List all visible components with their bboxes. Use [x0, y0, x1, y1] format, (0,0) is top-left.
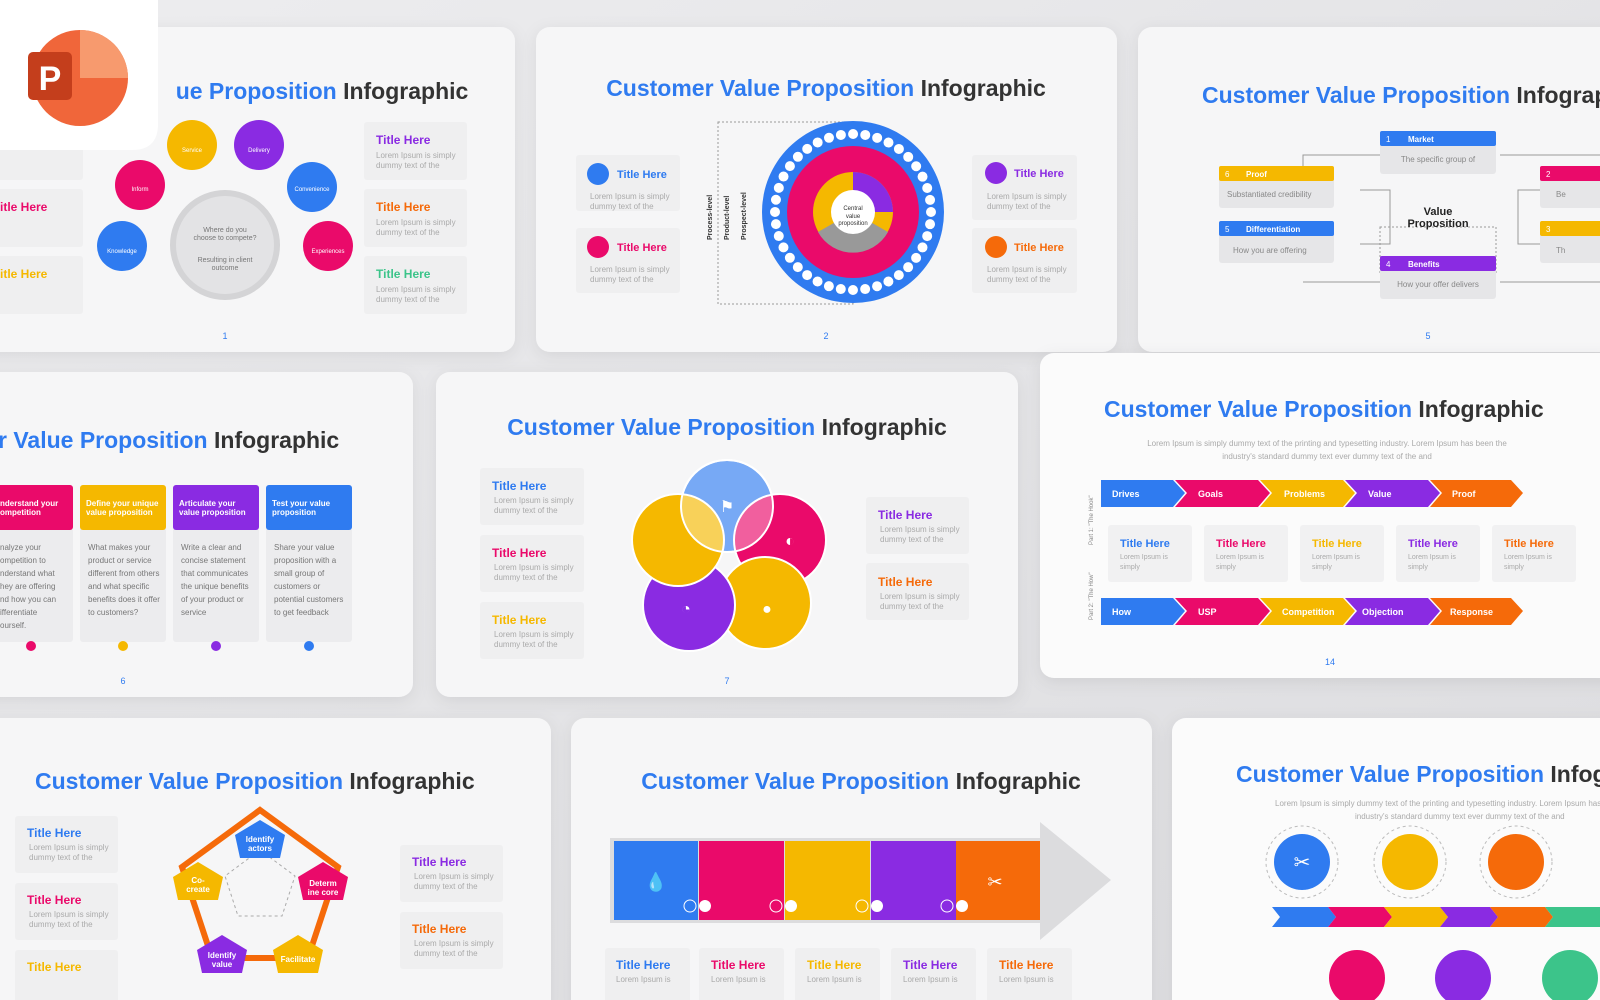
slide 6: four columns: ompetition — [0, 508, 41, 517]
slide 1: circle diagram: dummy text of the — [376, 228, 440, 237]
slide 6: four columns: to customers? — [88, 608, 139, 617]
slide 14 title: Customer Value Proposition Infographic — [1104, 396, 1544, 422]
slide 1: circle diagram: Experiences — [311, 249, 345, 255]
slide 5: flow diagram: Substantiated credibility — [1227, 190, 1312, 199]
slide: pentagon: value — [212, 960, 233, 969]
slide: circle icons: industry's standard dummy text ever dummy text of the and — [1355, 812, 1565, 821]
slide: pentagon: Lorem Ipsum is simply — [414, 872, 494, 881]
slide 1: circle diagram: Where do you — [203, 227, 247, 234]
slide: pentagon: Co- — [191, 876, 205, 885]
slide: big arrow bar: Lorem Ipsum is — [999, 975, 1054, 984]
slide: pentagon: create — [186, 885, 210, 894]
slide 14: arrow rows: How — [1112, 607, 1132, 617]
slide 6: four columns: to get feedback — [274, 608, 330, 617]
slide 1: circle diagram — [0, 27, 515, 352]
slide 7: venn: Lorem Ipsum is simply — [494, 563, 574, 572]
slide 6: four columns: ompetition to — [0, 556, 46, 565]
slide 14: arrow rows: Response — [1450, 607, 1493, 617]
slide 14: arrow rows: Title Here — [1504, 538, 1554, 550]
slide 5: flow diagram: Differentiation — [1246, 225, 1300, 234]
slide 1: circle diagram: Delivery — [248, 148, 270, 154]
slide 7: venn: Title Here — [492, 546, 547, 560]
slide 6: four columns: proposition — [272, 508, 316, 517]
slide 6: four columns: Write a clear and — [181, 543, 241, 552]
slide 2: wheel: Lorem Ipsum is simply — [590, 265, 670, 274]
slide 1: circle diagram: Lorem Ipsum is simply — [376, 218, 456, 227]
slide 14: arrow rows: Goals — [1198, 489, 1223, 499]
slide 2: wheel: proposition — [838, 221, 868, 227]
slide: pentagon: Lorem Ipsum is simply — [414, 939, 494, 948]
slide 7: venn: ● — [762, 601, 772, 618]
slide: pentagon: Title Here — [412, 922, 467, 936]
slide 5: flow diagram: The specific group of — [1401, 155, 1476, 164]
slide: pentagon — [0, 718, 551, 1000]
slide 7: venn: ◔ — [681, 601, 691, 618]
slide 6: four columns: ourself. — [0, 621, 26, 630]
slide: pentagon: Title Here — [27, 960, 82, 974]
slide: big arrow bar: Title Here — [999, 958, 1054, 972]
slide 7: venn: Lorem Ipsum is simply — [880, 525, 960, 534]
slide 7: venn: dummy text of the — [494, 506, 558, 515]
slide 14: arrow rows: Title Here — [1120, 538, 1170, 550]
arrow slide title: Customer Value Proposition Infographic — [641, 768, 1081, 794]
slide 6: four columns: Define your unique — [86, 499, 159, 508]
slide 7: venn: Lorem Ipsum is simply — [880, 592, 960, 601]
slide 7: venn: dummy text of the — [494, 640, 558, 649]
slide: big arrow bar — [571, 718, 1152, 1000]
slide 1: circle diagram: Resulting in client — [198, 257, 252, 264]
slide 14: arrow rows: USP — [1198, 607, 1217, 617]
slide 14: arrow rows: 14 — [1325, 657, 1335, 667]
slide 6: four columns: nd how you can — [0, 595, 56, 604]
slide 6: four columns: Test your value — [272, 499, 331, 508]
slide 5: flow diagram: How your offer delivers — [1397, 280, 1479, 289]
slide 14: arrow rows: simply — [1504, 564, 1524, 571]
slide: pentagon: Title Here — [412, 855, 467, 869]
slide 2: wheel: Central — [843, 206, 863, 212]
slide 5: flow diagram: Th — [1556, 246, 1565, 255]
slide 2: wheel: dummy text of the — [590, 275, 654, 284]
slide 14: arrow rows: Lorem Ipsum is — [1312, 554, 1360, 561]
slide 5: flow diagram: How you are offering — [1233, 246, 1307, 255]
slide: big arrow bar: Title Here — [807, 958, 862, 972]
slide 2: wheel: Prospect-level — [741, 192, 748, 240]
powerpoint logo — [0, 0, 158, 150]
slide 6: four columns: nalyze your — [0, 543, 41, 552]
slide 1: circle diagram: Inform — [131, 187, 149, 193]
slide 2: wheel: Title Here — [1014, 168, 1064, 180]
slide 6: four columns: of your product or — [181, 595, 244, 604]
slide 5: flow diagram: 3 — [1546, 225, 1551, 234]
slide 7: venn: dummy text of the — [494, 573, 558, 582]
slide: big arrow bar: Lorem Ipsum is — [807, 975, 862, 984]
slide 5: flow diagram: Proposition — [1407, 218, 1469, 230]
slide 6 title: r Value Proposition Infographic — [0, 427, 339, 453]
slide: big arrow bar: Lorem Ipsum is — [616, 975, 671, 984]
slide: pentagon: Facilitate — [281, 955, 316, 964]
slide 1: circle diagram: Convenience — [294, 187, 330, 193]
slide 14: arrow rows: Title Here — [1312, 538, 1362, 550]
slide 6: four columns: nderstand your — [0, 499, 58, 508]
slide 6: four columns: product or service — [88, 556, 152, 565]
slide 14: arrow rows: Competition — [1282, 607, 1334, 617]
slide: big arrow bar: Title Here — [903, 958, 958, 972]
slide 14: arrow rows: simply — [1408, 564, 1428, 571]
slide 6: four columns: What makes your — [88, 543, 151, 552]
slide: pentagon: Lorem Ipsum is simply — [29, 843, 109, 852]
slide 14: arrow rows: simply — [1120, 564, 1140, 571]
slide 2: wheel: 2 — [823, 331, 829, 341]
slide 14: arrow rows: simply — [1216, 564, 1236, 571]
slide 1 title: ue Proposition Infographic — [176, 78, 469, 104]
slide 5: flow diagram: 1 — [1386, 135, 1391, 144]
slide 7: venn: Lorem Ipsum is simply — [494, 496, 574, 505]
slide 6: four columns: 6 — [120, 676, 126, 686]
slide 6: four columns: value proposition — [86, 508, 153, 517]
slide: big arrow bar: Lorem Ipsum is — [903, 975, 958, 984]
slide 14: arrow rows: Part 1: "The Hook" — [1089, 495, 1095, 545]
slide 7: venn: Lorem Ipsum is simply — [494, 630, 574, 639]
slide 6: four columns: Articulate your — [179, 499, 235, 508]
slide 7 title: Customer Value Proposition Infographic — [507, 414, 947, 440]
slide 6: four columns: value proposition — [179, 508, 246, 517]
slide 1: circle diagram: itle Here — [0, 200, 48, 214]
slide 14: arrow rows: Objection — [1362, 607, 1404, 617]
slide 7: venn: ◐ — [785, 533, 795, 550]
slide 14: arrow rows: Value — [1368, 489, 1392, 499]
slide 5: flow diagram: Market — [1408, 135, 1434, 144]
slide 5: flow diagram: 4 — [1386, 260, 1391, 269]
slide 14: arrow rows: Proof — [1452, 489, 1477, 499]
slide: big arrow bar: ✂ — [987, 872, 1003, 892]
slide: pentagon: Identify — [208, 951, 237, 960]
slide: pentagon: dummy text of the — [29, 853, 93, 862]
slide 5: flow diagram: 2 — [1546, 170, 1551, 179]
slide 7: venn — [436, 372, 1018, 697]
slide 1: circle diagram: choose to compete? — [193, 235, 257, 242]
slide 2: wheel: dummy text of the — [987, 202, 1051, 211]
slide 6: four columns: service — [181, 608, 207, 617]
slide 14: arrow rows: Lorem Ipsum is simply dummy text of the printing and typesetting industry. Lorem Ipsum has been the — [1147, 439, 1507, 448]
slide: circle icons: ✂ — [1294, 852, 1310, 874]
slide 2: wheel: Title Here — [617, 169, 667, 181]
slide 2: wheel: Lorem Ipsum is simply — [590, 192, 670, 201]
slide 1: circle diagram: Lorem Ipsum is simply — [376, 285, 456, 294]
slide 1: circle diagram: Knowledge — [107, 249, 138, 255]
slide: pentagon: dummy text of the — [29, 920, 93, 929]
slide 1: circle diagram: dummy text of the — [376, 295, 440, 304]
slide 14: arrow rows: Title Here — [1408, 538, 1458, 550]
slide 7: venn: ⚑ — [720, 499, 734, 516]
slide: big arrow bar: Title Here — [616, 958, 671, 972]
slide 6: four columns: potential customers — [274, 595, 343, 604]
slide 5: flow diagram: Value — [1424, 206, 1452, 218]
slide 2: wheel: Title Here — [617, 242, 667, 254]
slide 5: flow diagram: 6 — [1225, 170, 1230, 179]
slide 14: arrow rows: Drives — [1112, 489, 1140, 499]
slide 14: arrow rows: simply — [1312, 564, 1332, 571]
slide 6: four columns: customers or — [274, 582, 321, 591]
slide 6: four columns — [0, 372, 413, 697]
slide: big arrow bar: Lorem Ipsum is — [711, 975, 766, 984]
slide 1: circle diagram: Title Here — [376, 267, 431, 281]
slide 1: circle diagram: Title Here — [376, 200, 431, 214]
slide 2: wheel — [536, 27, 1117, 352]
slide 7: venn: Title Here — [492, 613, 547, 627]
slide: pentagon: actors — [248, 844, 273, 853]
slide 6: four columns: small group of — [274, 569, 325, 578]
slide 7: venn: Title Here — [878, 508, 933, 522]
slide 2: wheel: dummy text of the — [590, 202, 654, 211]
slide 5: flow diagram — [1138, 27, 1600, 352]
slide 14: arrow rows: Lorem Ipsum is — [1504, 554, 1552, 561]
slide 14: arrow rows: Part 2: "The How" — [1089, 572, 1095, 620]
slide 7: venn: dummy text of the — [880, 602, 944, 611]
slide 2: wheel: Lorem Ipsum is simply — [987, 265, 1067, 274]
slide 14: arrow rows: Lorem Ipsum is — [1408, 554, 1456, 561]
slide 6: four columns: Share your value — [274, 543, 335, 552]
slide: circle icons — [1172, 718, 1600, 1000]
slide 6: four columns: and what specific — [88, 582, 149, 591]
slide: pentagon: ine core — [308, 888, 339, 897]
slide: pentagon: Title Here — [27, 826, 82, 840]
slide 2: wheel: Lorem Ipsum is simply — [987, 192, 1067, 201]
slide 14: arrow rows: Problems — [1284, 489, 1325, 499]
powerpoint logo: P — [39, 60, 61, 98]
slide 14: arrow rows — [1040, 353, 1600, 678]
slide 7: venn: Title Here — [878, 575, 933, 589]
slide 1: circle diagram: Lorem Ipsum is simply — [376, 151, 456, 160]
slide: pentagon: dummy text of the — [414, 949, 478, 958]
slide 1: circle diagram: Title Here — [376, 133, 431, 147]
pentagon title: Customer Value Proposition Infographic — [35, 768, 475, 794]
slide: pentagon: Determ — [309, 879, 337, 888]
slide 5: flow diagram: Benefits — [1408, 260, 1440, 269]
slide: big arrow bar: 💧 — [645, 871, 667, 892]
slide 14: arrow rows: Title Here — [1216, 538, 1266, 550]
slide 1: circle diagram: outcome — [212, 265, 239, 272]
slide 1: circle diagram: dummy text of the — [376, 161, 440, 170]
slide 7: venn: Title Here — [492, 479, 547, 493]
slide 6: four columns: hey are offering — [0, 582, 55, 591]
slide 5: flow diagram: Proof — [1246, 170, 1267, 179]
slide 14: arrow rows: industry's standard dummy text ever dummy text of the and — [1222, 452, 1432, 461]
slide 1: circle diagram: 1 — [222, 331, 228, 341]
slide 1: circle diagram: Service — [182, 148, 203, 154]
slide 6: four columns: concise statement — [181, 556, 246, 565]
slide 7: venn: dummy text of the — [880, 535, 944, 544]
slide 5: flow diagram: Be — [1556, 190, 1566, 199]
slide 7: venn: 7 — [724, 676, 730, 686]
slide 1: circle diagram: itle Here — [0, 267, 48, 281]
slide 2 title: Customer Value Proposition Infographic — [606, 75, 1046, 101]
slide 6: four columns: the unique benefits — [181, 582, 249, 591]
slide 6: four columns: nderstand what — [0, 569, 55, 578]
slide: big arrow bar: Title Here — [711, 958, 766, 972]
slide 2: wheel: dummy text of the — [987, 275, 1051, 284]
slide 2: wheel: Title Here — [1014, 242, 1064, 254]
slide 6: four columns: benefits does it offer — [88, 595, 160, 604]
slide 6: four columns: ifferentiate — [0, 608, 38, 617]
slide 6: four columns: different from others — [88, 569, 159, 578]
slide 2: wheel: value — [846, 214, 861, 220]
slide 5: flow diagram: 5 — [1425, 331, 1431, 341]
slide: pentagon: Lorem Ipsum is simply — [29, 910, 109, 919]
slide 14: arrow rows: Lorem Ipsum is — [1120, 554, 1168, 561]
slide 6: four columns: that communicates — [181, 569, 248, 578]
slide 5: flow diagram: 5 — [1225, 225, 1230, 234]
slide: pentagon: dummy text of the — [414, 882, 478, 891]
slide 6: four columns: proposition with a — [274, 556, 337, 565]
slide: pentagon: Title Here — [27, 893, 82, 907]
slide 2: wheel: Product-level — [724, 196, 731, 240]
slide 2: wheel: Process-level — [707, 195, 714, 240]
slide: pentagon: Identify — [246, 835, 275, 844]
slide 14: arrow rows: Lorem Ipsum is — [1216, 554, 1264, 561]
